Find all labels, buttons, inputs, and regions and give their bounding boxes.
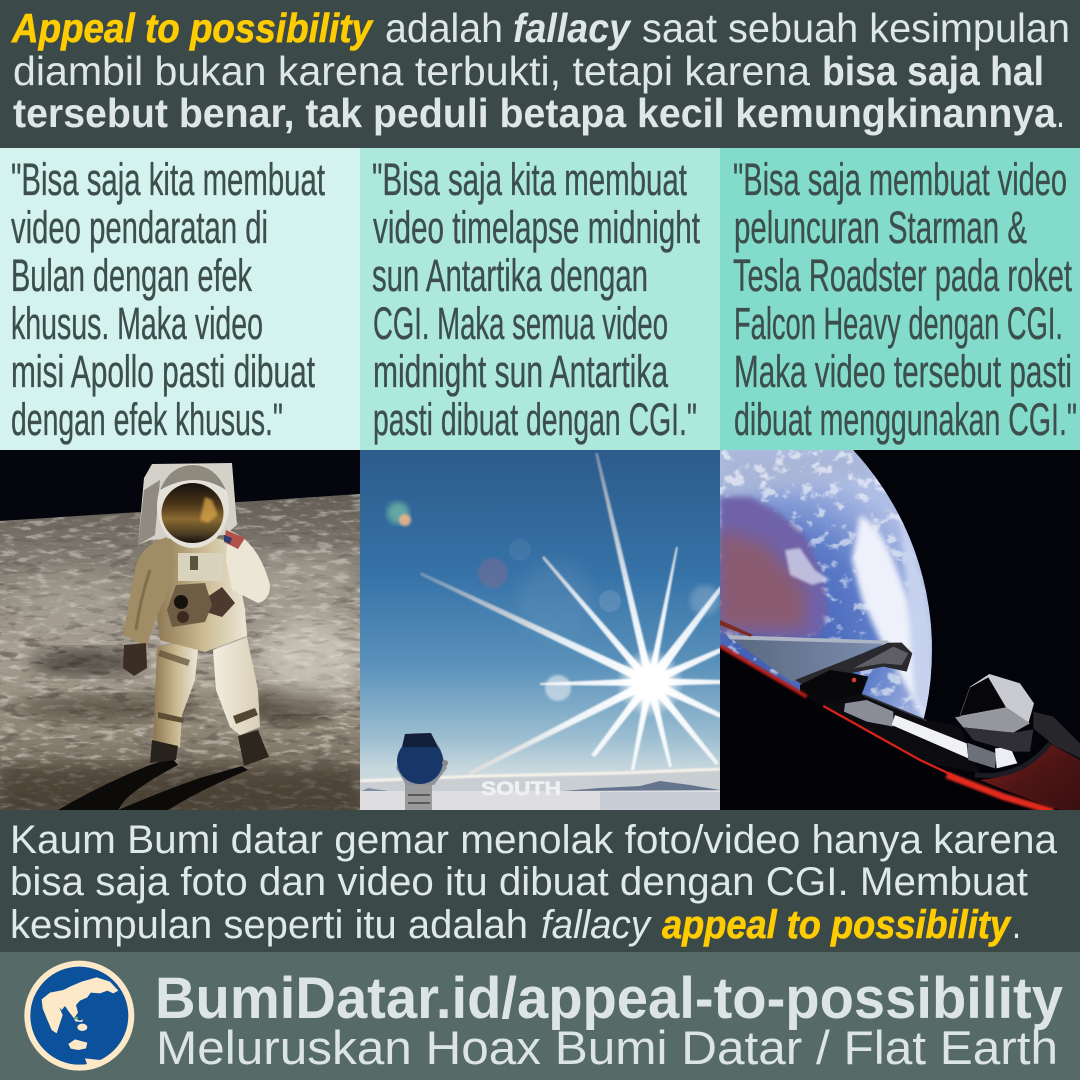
- headline text: fallacy: [513, 5, 632, 51]
- label SOUTH: SOUTH: [481, 779, 561, 800]
- astronaut figure: [123, 463, 270, 766]
- headline text: bisa saja hal: [822, 48, 1044, 94]
- panel: quote 2: pasti dibuat dengan CGI.": [373, 394, 697, 445]
- horizon clouds: [360, 768, 720, 810]
- chest pack: [178, 553, 223, 581]
- photo: Starman and Tesla Roadster: [720, 450, 1080, 810]
- cockpit interior: [828, 694, 924, 754]
- rear red body: [980, 743, 1080, 810]
- panel: quote 1: "Bisa saja kita membuat: [11, 154, 325, 205]
- conclusion panel: kesimpulan seperti itu adalah: [10, 903, 528, 947]
- header panel: [0, 0, 1080, 148]
- tagline: Meluruskan Hoax Bumi Datar / Flat Earth: [156, 1021, 1058, 1074]
- headline text: adalah: [385, 5, 503, 51]
- conclusion panel: bisa saja foto dan video itu dibuat dengan CGI. Membuat: [10, 860, 1028, 904]
- conclusion panel: [0, 810, 1080, 952]
- red rim: [720, 646, 807, 697]
- right arm: [226, 530, 270, 603]
- lens flares: [387, 502, 720, 701]
- conclusion panel: fallacy: [541, 903, 652, 947]
- headline text: saat sebuah kesimpulan: [642, 5, 1070, 51]
- panel: quote 1: misi Apollo pasti dibuat: [11, 346, 315, 397]
- visor: [162, 483, 224, 543]
- left arm: [123, 537, 168, 647]
- headline text: [11, 5, 1070, 136]
- sun rays: [420, 453, 722, 775]
- car lower black: [720, 646, 912, 810]
- headline text: Appeal to possibility: [11, 5, 374, 51]
- planet Earth: [720, 450, 932, 719]
- continent: [720, 497, 828, 640]
- helmet: [960, 674, 1034, 733]
- helmet: [157, 464, 229, 548]
- panel: quote 1: Bulan dengan efek: [11, 250, 252, 301]
- gloves: [123, 643, 147, 676]
- shoulder: [1033, 712, 1080, 758]
- dash mass: [800, 670, 868, 708]
- panel: quote 1: dengan efek khusus.": [11, 394, 283, 445]
- windshield frame: [795, 643, 912, 685]
- watch: [396, 733, 448, 810]
- backpack: [138, 463, 237, 545]
- panel: quote 2: sun Antartika dengan: [372, 250, 648, 301]
- photo: astronaut on the Moon: [0, 450, 360, 815]
- headline text: .: [1056, 90, 1065, 136]
- windshield: [727, 635, 888, 682]
- headline text: tersebut benar, tak peduli betapa kecil kemungkinannya: [13, 90, 1057, 136]
- car and Starman: [720, 620, 1080, 813]
- footer panel: [0, 952, 1080, 1080]
- panel: quote 2: "Bisa saja kita membuat: [372, 154, 687, 205]
- panel: quote 2: midnight sun Antartika: [373, 346, 669, 397]
- site address: BumiDatar.id/appeal-to-possibility: [155, 966, 1063, 1031]
- photo: midnight sun over Antarctica: [360, 450, 722, 810]
- headline text: diambil bukan karena terbukti, tetapi karena: [13, 48, 810, 94]
- conclusion panel: .: [1012, 903, 1021, 947]
- flag patch: [224, 530, 245, 549]
- boots: [150, 740, 178, 763]
- panel: quote 1: video pendaratan di: [11, 202, 268, 253]
- cloud mass: [852, 515, 930, 720]
- panel: quote 2: CGI. Maka semua video: [373, 298, 668, 349]
- panel: quote 2: video timelapse midnight: [373, 202, 700, 253]
- panel: quote 3: [720, 148, 1080, 450]
- right leg: [213, 637, 260, 735]
- shadow of astronaut: [58, 758, 248, 810]
- panel: quote 1: [0, 148, 360, 450]
- torso: [155, 536, 247, 652]
- conclusion panel: appeal to possibility: [662, 903, 1012, 947]
- panel: quote 2: [360, 148, 720, 450]
- Starman glove and arm: [844, 700, 893, 727]
- left leg: [153, 644, 198, 747]
- sun: [616, 649, 684, 717]
- panel: quote 1: khusus. Maka video: [11, 298, 263, 349]
- conclusion panel: Kaum Bumi datar gemar menolak foto/video hanya karena: [10, 818, 1057, 862]
- icon: globe logo: [24, 961, 134, 1071]
